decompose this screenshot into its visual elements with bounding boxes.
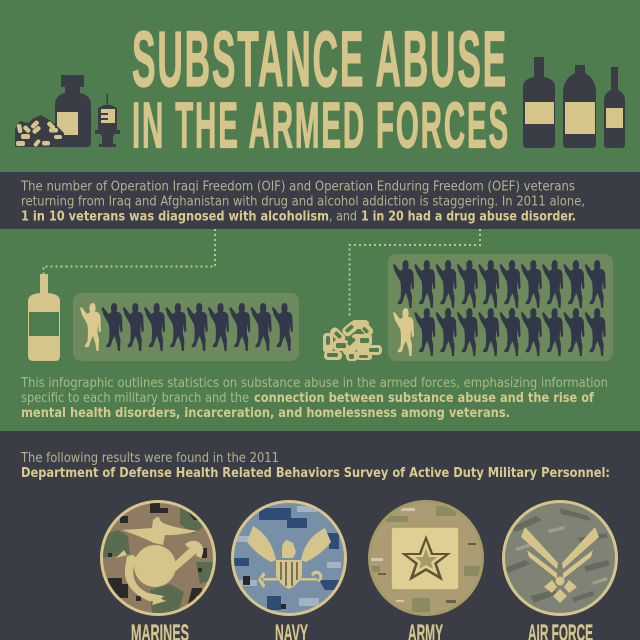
intro text: 1 in 10 veterans was diagnosed with alcoholism	[21, 210, 329, 224]
medallion: marines	[100, 500, 216, 616]
medallion: navy	[231, 500, 347, 616]
intro text: returning from Iraq and Afghanistan with drug and alcohol addiction is staggering. In 2011 alone,	[21, 194, 585, 210]
medallion: air force	[502, 500, 618, 616]
background: dark bottom	[0, 431, 640, 640]
intro text: , and	[329, 210, 357, 224]
dotted connector right	[350, 229, 480, 318]
intro text	[20, 180, 585, 224]
outline text: mental health disorders, incarceration, and homelessness among veterans.	[21, 406, 510, 421]
dotted connector left	[44, 229, 215, 274]
outline text: connection between substance abuse and the rise of	[254, 391, 594, 406]
medallion: army	[368, 500, 484, 616]
survey text: The following results were found in the 2011	[20, 451, 279, 466]
icon: tan bottle	[28, 274, 60, 361]
background: green top	[0, 0, 640, 431]
icon: tan pill pile	[323, 319, 382, 361]
panel: 1 in 10 soldiers	[73, 293, 299, 361]
icon: pills, pill bottle and syringe	[15, 75, 120, 147]
title	[132, 14, 510, 162]
survey text	[20, 451, 610, 481]
outline text: specific to each military branch and the	[21, 391, 249, 406]
outline text	[20, 376, 608, 421]
intro text: 1 in 20 had a drug abuse disorder.	[361, 210, 576, 224]
icon: three bottles	[523, 57, 625, 148]
intro text: The number of Operation Iraqi Freedom (OIF) and Operation Enduring Freedom (OEF) veterans	[20, 180, 575, 194]
panel: 1 in 20 soldiers	[388, 254, 613, 361]
dark intro band	[0, 172, 640, 229]
